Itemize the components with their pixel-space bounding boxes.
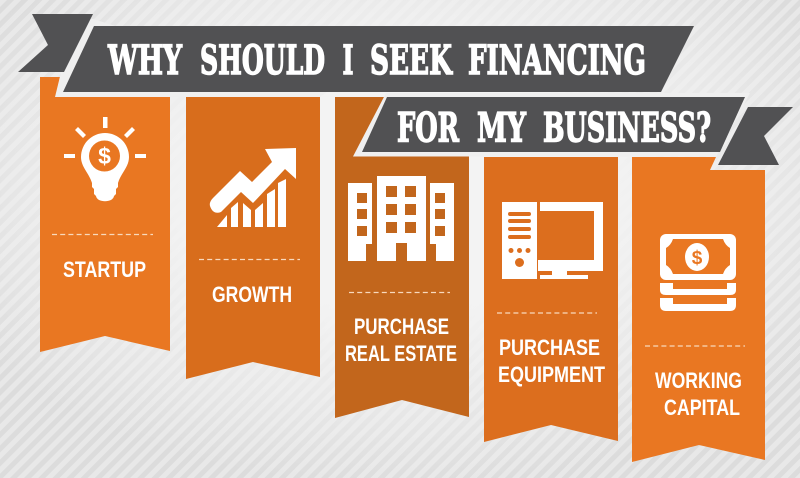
label: purchase equipment: [498, 335, 605, 387]
heading: line two: [397, 104, 711, 152]
panel: working capital: [632, 157, 765, 462]
label: purchase real estate: REAL ESTATE: [345, 341, 457, 366]
heading: line two: BUSINESS?: [543, 104, 711, 152]
divider: real estate: [349, 292, 450, 294]
label: purchase equipment: PURCHASE: [499, 335, 600, 360]
icon: office buildings: [348, 176, 454, 261]
icon: light bulb with dollar sign: $: [98, 143, 111, 169]
heading: line two: FOR: [397, 104, 459, 152]
divider: startup: [52, 234, 153, 236]
heading: line one: FINANCING: [468, 37, 646, 84]
label: startup: STARTUP: [63, 257, 146, 282]
divider: equipment: [497, 312, 597, 314]
ribbon: second title: [353, 93, 793, 165]
panel: purchase real estate: [335, 97, 469, 418]
label: growth: GROWTH: [212, 282, 292, 307]
divider: working capital: [645, 345, 745, 347]
heading: line two: MY: [477, 104, 526, 152]
panel: growth: [186, 97, 320, 379]
icon: light bulb with dollar sign: [64, 117, 146, 201]
label: working capital: [655, 368, 742, 420]
heading: line one: I: [342, 37, 354, 84]
ribbon tail: left: [18, 14, 93, 72]
icon: stack of money: $: [692, 248, 703, 269]
ribbon tail: right: [718, 107, 793, 165]
heading: line one: SHOULD: [200, 37, 325, 84]
label: purchase real estate: PURCHASE: [354, 314, 449, 339]
icon: growth chart with arrow: [210, 148, 296, 227]
icon: stack of money: [660, 234, 736, 311]
heading: line one: [107, 37, 646, 84]
ribbon: top title: [18, 14, 694, 97]
label: working capital: CAPITAL: [664, 395, 740, 420]
panel: purchase equipment: [484, 157, 618, 442]
panel: startup: [40, 77, 170, 352]
divider: growth: [199, 258, 300, 260]
label: purchase real estate: [345, 314, 457, 366]
label: working capital: WORKING: [655, 368, 742, 393]
heading: line one: SEEK: [370, 37, 453, 84]
heading: line one: WHY: [107, 37, 182, 84]
label: purchase equipment: EQUIPMENT: [498, 362, 605, 387]
icon: desktop computer: [502, 202, 603, 279]
